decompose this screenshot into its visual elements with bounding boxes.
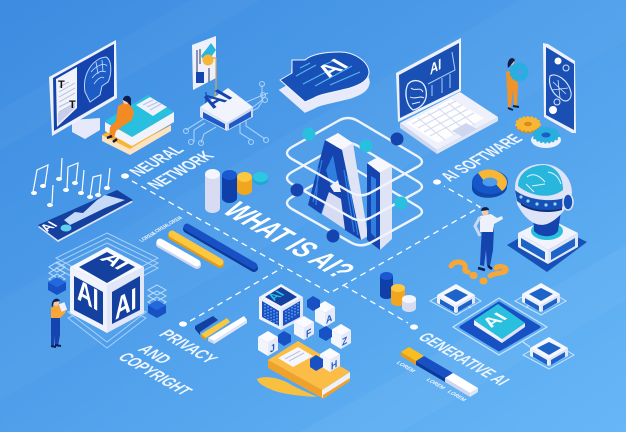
icon: server right xyxy=(515,283,566,315)
icon: gears xyxy=(516,117,561,148)
chart: cylinders xyxy=(205,169,268,213)
heading: neural network: NEURAL xyxy=(124,142,188,179)
chart: segmented generative bar xyxy=(394,347,478,403)
icon: AI chip with circuits xyxy=(184,82,268,146)
heading: privacy and copyright: COPYRIGHT xyxy=(114,350,197,398)
icon: small stacked block right xyxy=(148,285,166,318)
icon: stack of books xyxy=(102,95,174,155)
chart: privacy mini bars xyxy=(195,316,247,344)
icon: letter cubes: F xyxy=(306,327,311,341)
icon: phone with brain and gears xyxy=(543,43,576,133)
heading: neural network: NETWORK xyxy=(142,148,219,192)
icon: laptop: AI xyxy=(430,55,441,79)
icon: letter cubes: J xyxy=(270,342,275,356)
icon: robot head on base xyxy=(507,164,587,272)
icon: AI chip with circuits: AI xyxy=(194,86,239,112)
rings front edges xyxy=(292,159,417,245)
chart: horizontal bars with labels: LOREM xyxy=(152,224,171,235)
heading: privacy and copyright: PRIVACY xyxy=(155,327,222,366)
icon: monitor with brain xyxy=(49,40,117,139)
icon: cube H on book: H xyxy=(331,358,337,373)
chart: donut xyxy=(472,170,508,198)
icon: data cube xyxy=(259,284,303,330)
heading: privacy and copyright xyxy=(114,327,222,398)
person: reader on books xyxy=(107,96,134,142)
icon: AI cube with layered rings: AI xyxy=(77,273,99,319)
person: holding gear xyxy=(506,58,528,110)
icon: server lower right xyxy=(523,337,574,369)
chart: horizontal bars with labels: LOREM xyxy=(166,216,185,227)
icon: AI head speech shape: AI xyxy=(311,55,355,81)
ring nodes xyxy=(290,128,408,242)
heading: generative AI: GENERATIVE AI xyxy=(414,330,514,388)
icon: small stacked block left xyxy=(48,262,66,295)
icon: AI cube with layered rings: AI xyxy=(95,249,136,273)
icon: music notes and AI player xyxy=(31,158,133,242)
icon: rings behind AI xyxy=(287,118,422,245)
connector dots xyxy=(121,173,441,330)
icon: question marks xyxy=(451,262,506,281)
icon: monitor with brain: T xyxy=(69,99,76,111)
icon: AI cube with layered rings xyxy=(56,233,158,348)
icon: AI head speech shape xyxy=(280,52,369,112)
chart: small cylinders xyxy=(380,272,416,312)
icon: document card and circuit lines xyxy=(192,36,216,108)
person: woman with tablet xyxy=(51,299,67,347)
icon: letter cubes xyxy=(258,296,351,356)
icon: AI cube with layered rings: AI xyxy=(115,281,137,327)
icon: letter cubes: Z xyxy=(342,335,347,349)
title graphic: 3D letters AI xyxy=(308,133,392,250)
heading: AI software: AI SOFTWARE xyxy=(435,131,527,184)
icon: monitor with brain: T xyxy=(58,79,65,91)
icon: cube H on book xyxy=(310,348,340,373)
chart: horizontal bars with labels: LOREM xyxy=(139,232,158,243)
icon: generative AI chip with servers xyxy=(453,298,547,355)
icon: letter cubes: A xyxy=(326,312,332,327)
person: presenter xyxy=(475,207,503,270)
icon: laptop xyxy=(396,38,498,154)
dashed connector lines xyxy=(132,181,480,323)
chart: segmented generative bar: LOREM xyxy=(394,361,416,374)
chart: segmented generative bar: LOREM xyxy=(445,390,467,403)
heading: what is AI: WHAT IS AI? xyxy=(215,197,363,283)
icon: open book and feather xyxy=(257,341,350,399)
chart: horizontal bars with labels xyxy=(139,216,254,268)
chart: segmented generative bar: LOREM xyxy=(424,378,446,391)
icon: data cube: AI xyxy=(264,288,288,303)
icon: generative AI chip with servers: AI xyxy=(477,310,512,330)
icon: music notes and AI player: AI xyxy=(36,219,61,234)
heading: privacy and copyright: AND xyxy=(134,342,176,367)
heading: neural network xyxy=(124,142,219,192)
icon: server left xyxy=(430,284,481,315)
